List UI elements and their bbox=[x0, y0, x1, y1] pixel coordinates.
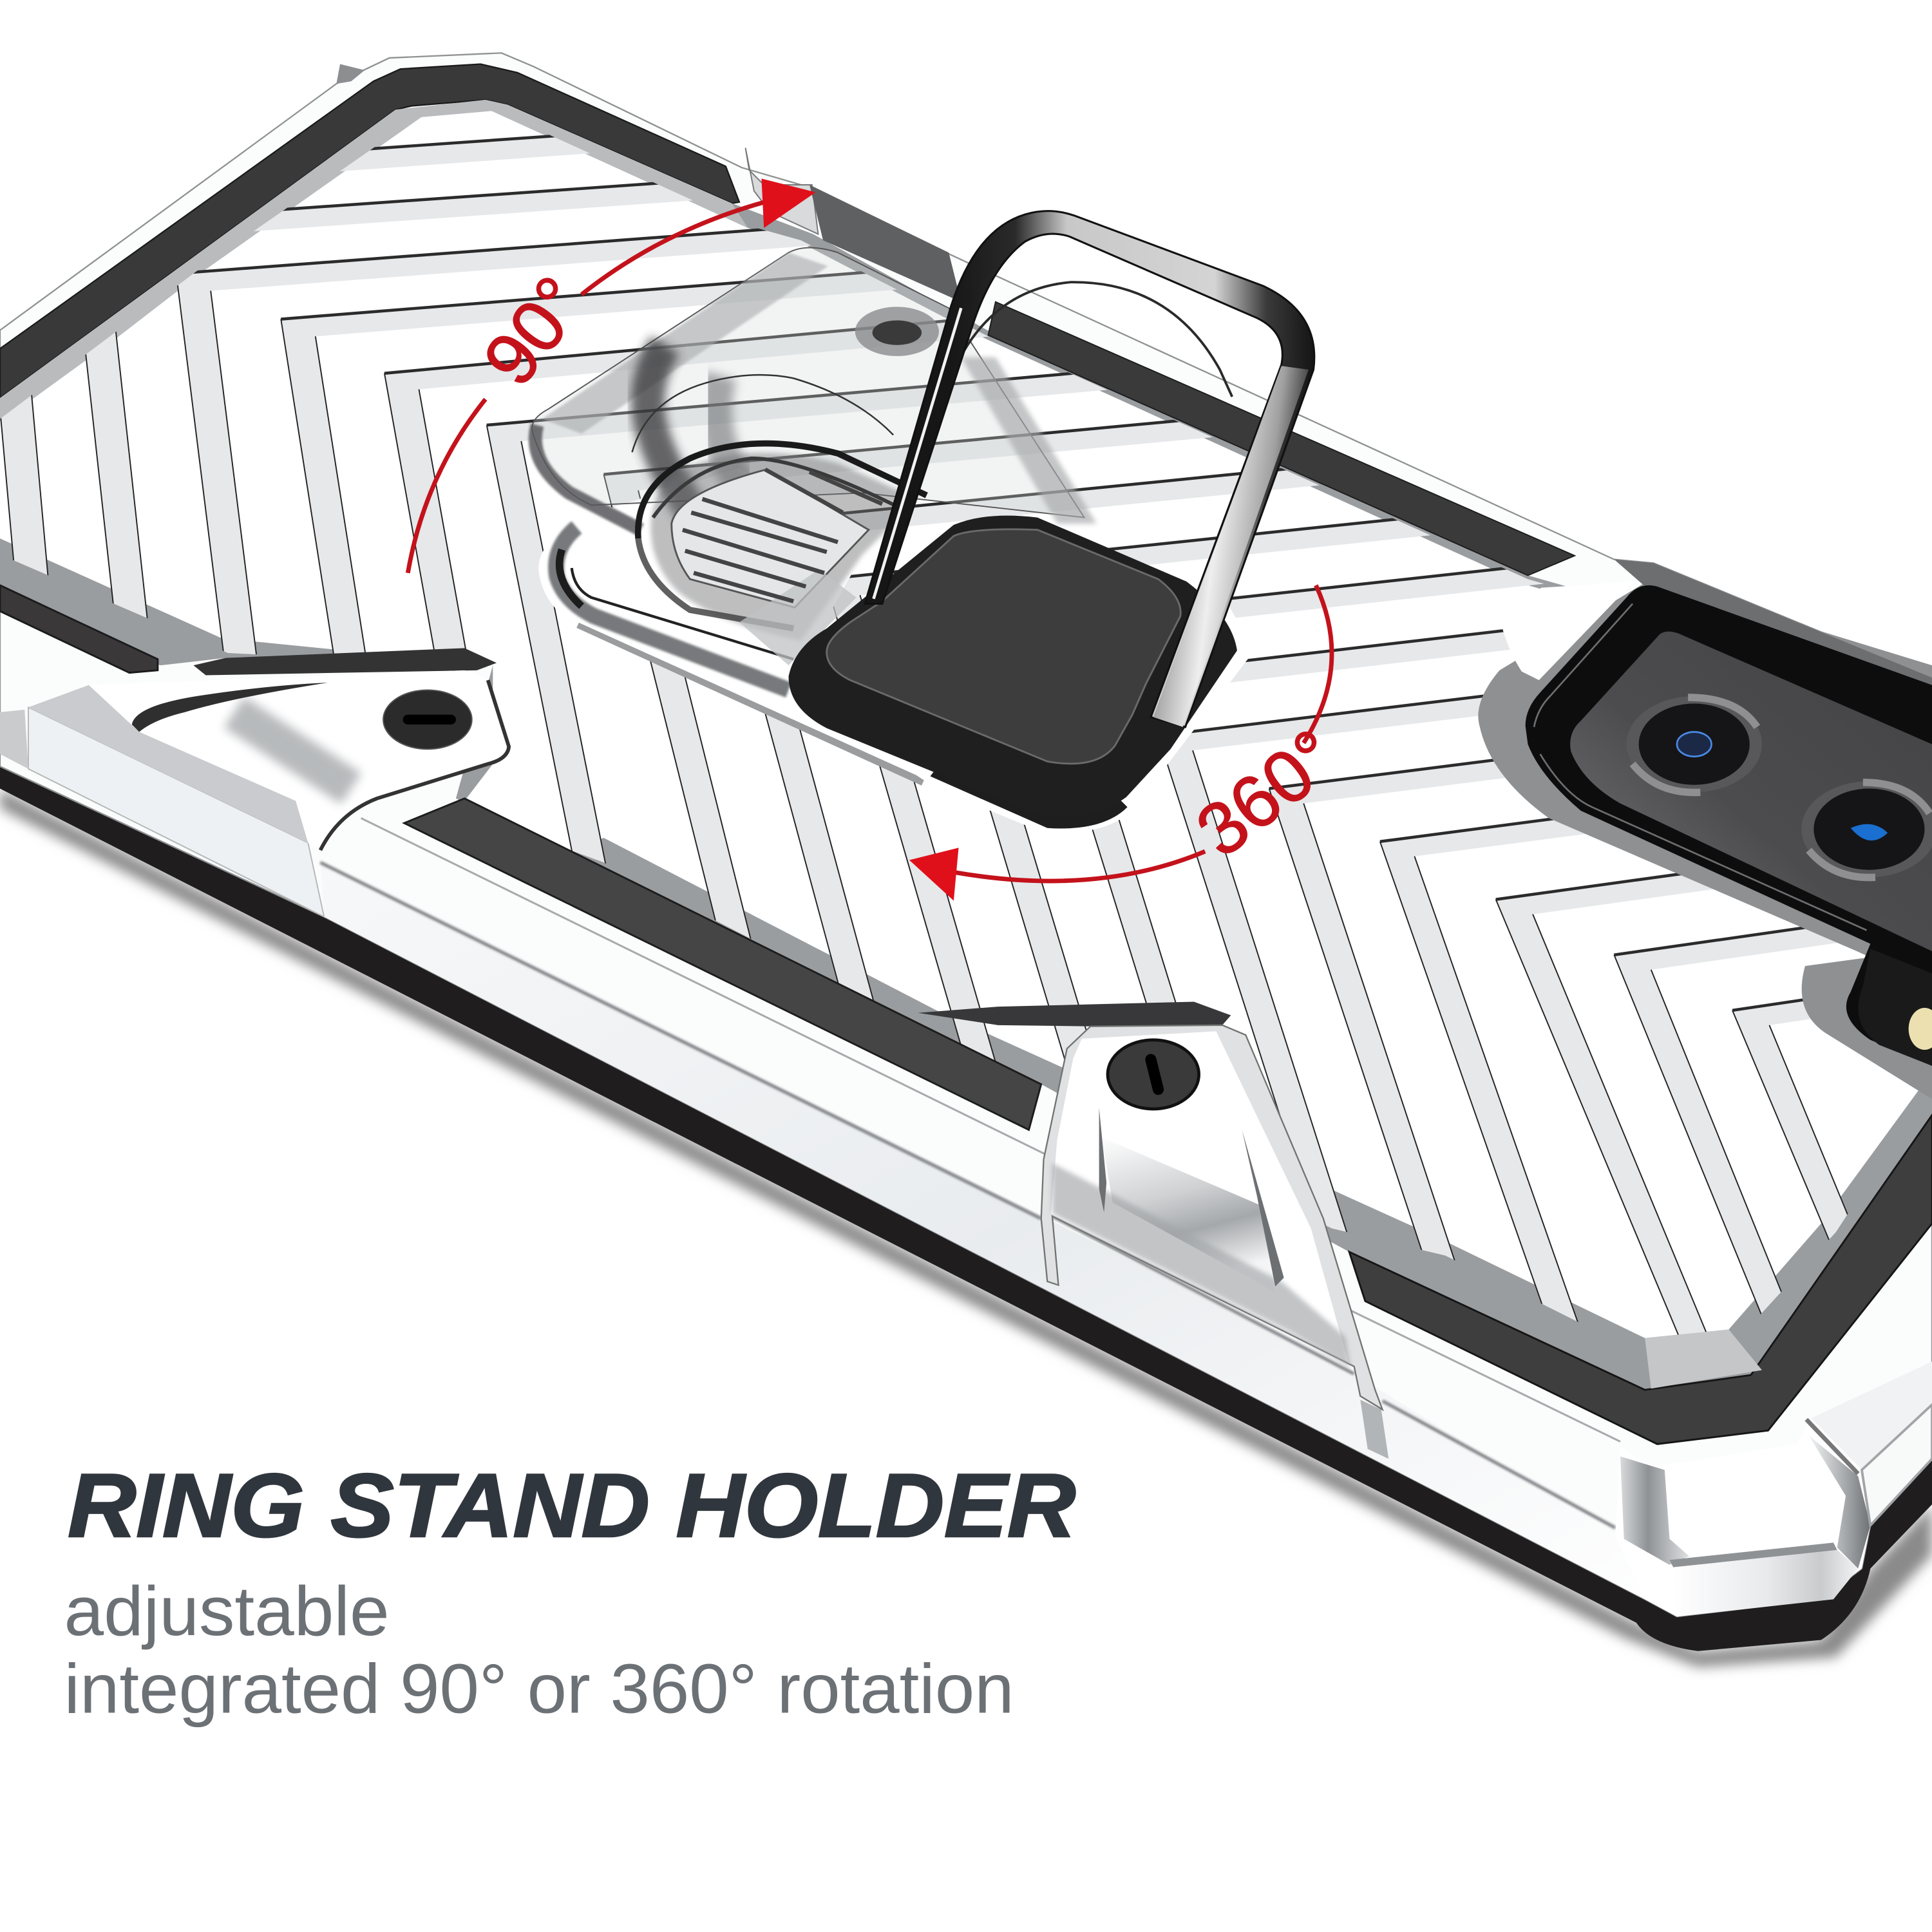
corner right shade bbox=[1809, 1435, 1870, 1569]
side ridge shadow bbox=[320, 862, 1615, 1528]
white camera corner pad bbox=[1499, 582, 1634, 680]
corner flap bbox=[336, 64, 365, 84]
camera gray base bbox=[1478, 579, 1932, 986]
shadow under base bbox=[931, 752, 1128, 828]
white halo behind base bbox=[788, 579, 1255, 833]
ghost screw bbox=[855, 307, 939, 356]
pad metallic stripe bbox=[234, 712, 351, 788]
pad gray edge bbox=[28, 685, 308, 843]
ghost bar dark bbox=[648, 345, 715, 542]
screw slot bbox=[1144, 1053, 1165, 1096]
arrowhead bbox=[761, 178, 816, 228]
dome lower outline bbox=[638, 538, 793, 629]
dome ribs bbox=[683, 469, 882, 601]
ghost arch bbox=[632, 375, 893, 452]
side seam left bbox=[1041, 1218, 1058, 1285]
lens 1 glint bbox=[1677, 732, 1712, 757]
corner left shade bbox=[1620, 1456, 1689, 1565]
corner lower face bbox=[1673, 1550, 1858, 1616]
ring arch bbox=[882, 282, 1232, 601]
pad face bbox=[28, 670, 509, 850]
camera black bezel bbox=[1526, 585, 1932, 1066]
corner recess wedge bbox=[1645, 1329, 1762, 1388]
subtitle bbox=[64, 1572, 1014, 1728]
dome ribs panel bbox=[672, 469, 869, 607]
subtitle line 1: adjustable bbox=[64, 1572, 390, 1651]
ghost plate transparent bbox=[532, 248, 1084, 518]
dark top-left border bbox=[0, 64, 739, 398]
arc right bbox=[1303, 585, 1332, 743]
ghost bar light bbox=[716, 376, 742, 487]
right bumper lower bbox=[1862, 1405, 1932, 1526]
rotation arrow: 90 degrees bbox=[408, 178, 816, 573]
camera glass bbox=[1570, 632, 1932, 951]
plate silver rim bbox=[556, 527, 788, 690]
dome outline bbox=[638, 444, 927, 538]
ghost top band bbox=[542, 252, 828, 433]
side face: left end bbox=[28, 707, 324, 916]
lens 1 bbox=[1627, 696, 1762, 793]
pad outer strip bbox=[1041, 1025, 1383, 1410]
dark band: left bbox=[0, 585, 158, 673]
arc upper bbox=[582, 200, 774, 294]
lens 2 body bbox=[1814, 788, 1925, 870]
side face: left and centre bbox=[320, 862, 1677, 1616]
dark band: middle bbox=[404, 799, 1041, 1130]
case shadow bbox=[0, 788, 1932, 1667]
plate face bbox=[538, 468, 949, 779]
corner middle shade bbox=[1669, 1542, 1837, 1567]
left screw pad bbox=[28, 648, 509, 850]
subtitle line 2: integrated 90° or 360° rotation bbox=[64, 1649, 1014, 1728]
arrowhead bbox=[909, 848, 959, 901]
bezel highlight bbox=[1534, 604, 1867, 931]
heading: RING STAND HOLDER bbox=[68, 1455, 1075, 1556]
pin at top border bbox=[746, 148, 818, 234]
plate dark highlight bbox=[560, 549, 582, 606]
rotation arrow: 360 degrees bbox=[909, 585, 1352, 901]
flash lens bezel bbox=[1858, 949, 1932, 1066]
black case underside bbox=[0, 766, 1932, 1651]
corner seam bbox=[1806, 1419, 1858, 1473]
ring frame bbox=[865, 211, 1314, 727]
right bumper bbox=[1811, 1361, 1932, 1470]
dark band: lower right corner bbox=[1349, 1115, 1932, 1444]
pad dark edge bbox=[193, 648, 497, 675]
screw bbox=[383, 690, 472, 749]
lens 1 ring bbox=[1627, 696, 1762, 792]
guide line along edge bbox=[361, 818, 1620, 1442]
label 360 degrees: 360° bbox=[1182, 714, 1352, 873]
light top recess strip bbox=[0, 100, 748, 421]
chevron ribs bbox=[0, 135, 1848, 1334]
ghost screw centre bbox=[873, 320, 922, 345]
arc bottom bbox=[955, 851, 1205, 881]
ghost rim bbox=[535, 425, 641, 530]
screw bbox=[1108, 1040, 1199, 1109]
ghost leg shadow bbox=[961, 357, 1097, 524]
plate and ghost bbox=[532, 248, 1097, 780]
black rubber base bbox=[788, 516, 1237, 817]
base collar bbox=[739, 569, 857, 665]
dark pin shade bbox=[810, 185, 961, 302]
dark band: upper right bbox=[988, 302, 1575, 575]
gray inner recess bbox=[0, 100, 1932, 1390]
lens 2 glint bbox=[1851, 824, 1888, 840]
flash gray base bbox=[1802, 949, 1932, 1099]
lens 2 bbox=[1801, 781, 1932, 878]
corner bumper bbox=[1615, 1361, 1932, 1616]
pad wedge left bbox=[1099, 1108, 1106, 1213]
ring stand holder bbox=[532, 211, 1314, 833]
pad contour bbox=[320, 680, 509, 850]
flash bbox=[1909, 1008, 1932, 1050]
lens 1 body bbox=[1639, 703, 1750, 785]
ring right leg bbox=[1153, 366, 1309, 727]
left end gray tab bbox=[0, 710, 28, 769]
pad wedge right bbox=[1242, 1130, 1284, 1286]
base top face bbox=[827, 529, 1180, 764]
plate lower strip bbox=[579, 622, 924, 780]
dome shadow ring bbox=[650, 453, 918, 641]
pad dark edge bbox=[918, 1001, 1231, 1027]
arc lower bbox=[408, 399, 486, 573]
dome second outline bbox=[653, 459, 900, 518]
camera module bbox=[1478, 560, 1932, 1099]
ring left leg highlight bbox=[874, 308, 961, 599]
white interior panel bbox=[0, 111, 1932, 1338]
screw slot bbox=[403, 715, 456, 724]
label 90 degrees: 90° bbox=[468, 261, 601, 401]
pad gradient bbox=[1101, 1137, 1274, 1291]
side seam bbox=[1360, 1399, 1388, 1459]
pad swoosh bbox=[132, 683, 328, 732]
pad face bbox=[1051, 1031, 1348, 1361]
lower screw pad bbox=[918, 1001, 1383, 1410]
lens 2 ring highlight bbox=[1809, 782, 1929, 878]
lens 1 ring highlight bbox=[1633, 697, 1757, 793]
lens 2 ring bbox=[1801, 781, 1932, 877]
silver top strip bbox=[1614, 560, 1932, 715]
corner rim bbox=[1615, 1418, 1870, 1616]
plate inner line bbox=[572, 568, 793, 659]
lower pad gray band bbox=[1052, 1163, 1350, 1368]
